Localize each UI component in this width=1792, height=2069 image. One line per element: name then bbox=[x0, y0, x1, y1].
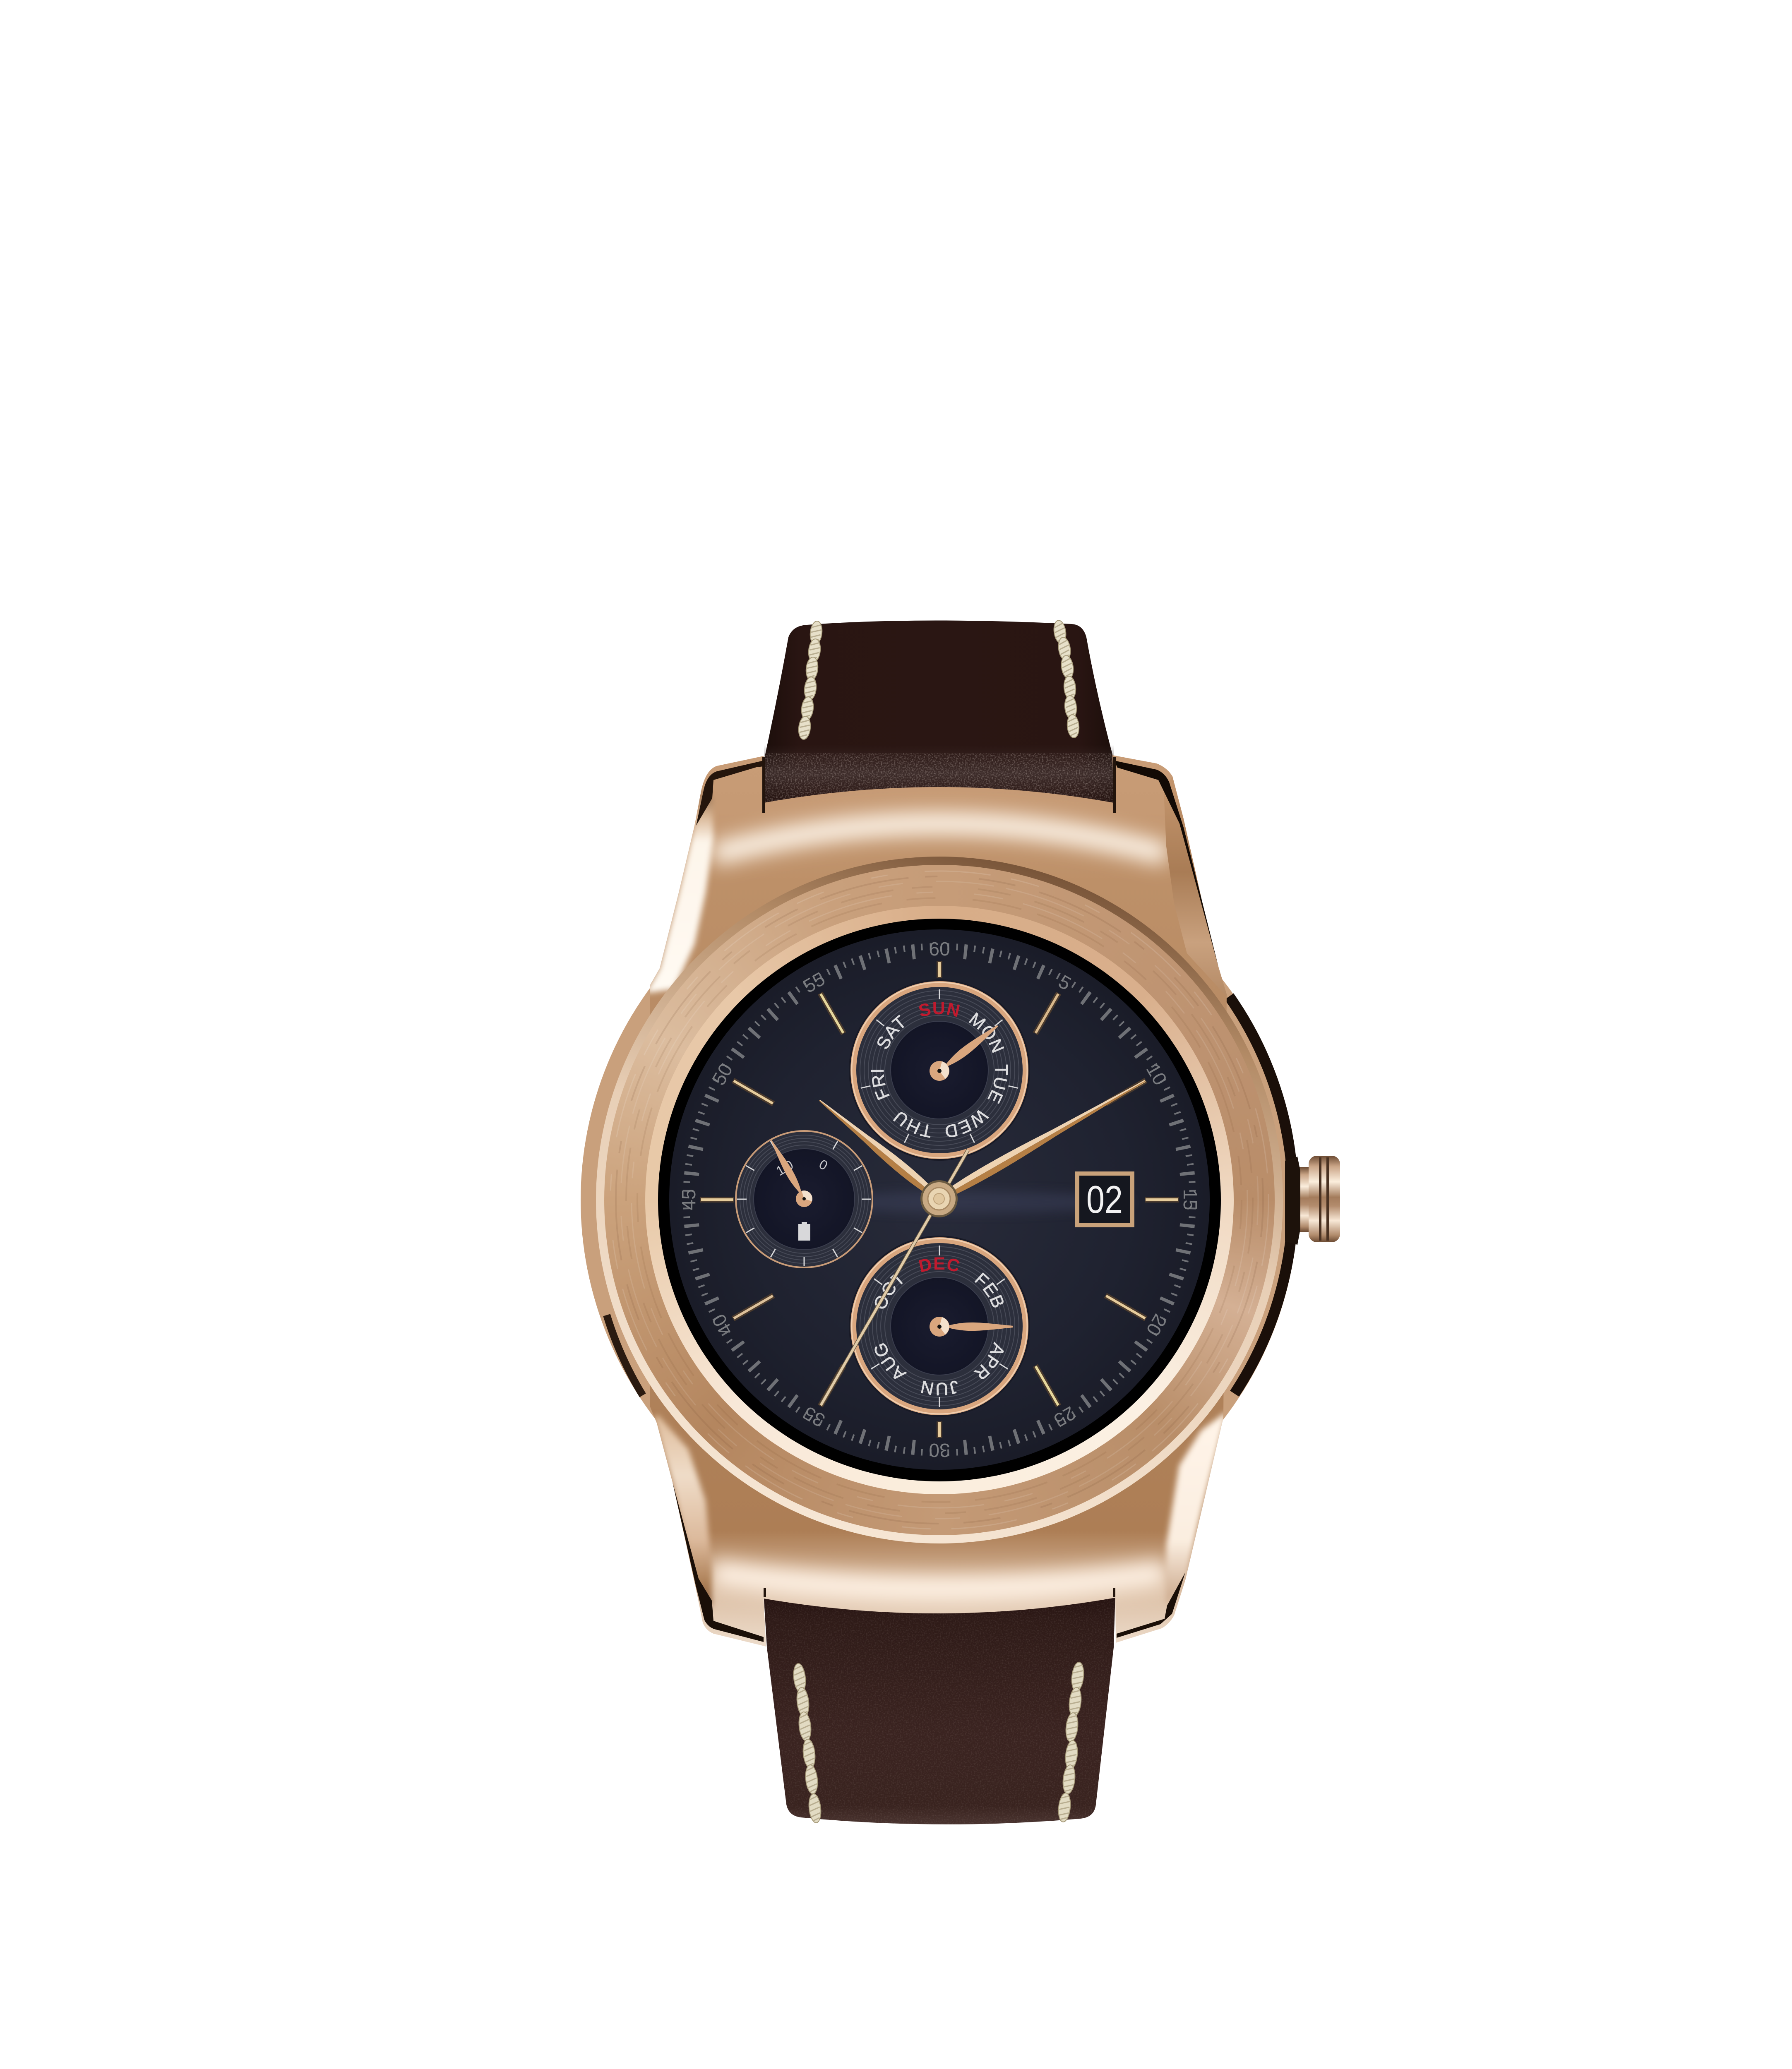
minute scale numbers: 25 bbox=[1050, 1402, 1079, 1431]
minute scale numbers: 15 bbox=[1179, 1189, 1201, 1210]
subdial: battery bbox=[736, 1131, 872, 1267]
dark edge upper-right bbox=[1114, 761, 1218, 967]
minute scale numbers: 50 bbox=[708, 1060, 737, 1089]
minute scale numbers: 55 bbox=[800, 968, 829, 997]
subdial: day of week: WED bbox=[938, 1103, 993, 1145]
crown bbox=[1292, 1156, 1340, 1242]
dial face bbox=[669, 929, 1210, 1470]
minute scale ticks bbox=[686, 946, 1193, 1453]
dial bbox=[669, 929, 1210, 1470]
minute scale numbers: 60 bbox=[929, 938, 950, 960]
dark edge lower-left bbox=[673, 1482, 764, 1642]
black inner ring bbox=[658, 919, 1221, 1481]
strap notches bbox=[764, 757, 1115, 1597]
watch case and lugs bbox=[646, 755, 1231, 1647]
case back edge bbox=[581, 841, 1300, 1559]
watch bbox=[581, 619, 1340, 1829]
minute scale numbers: 5 bbox=[1055, 970, 1075, 994]
subdial: day of week: MON bbox=[962, 1006, 1011, 1060]
inner polished bezel bbox=[645, 906, 1234, 1494]
subdial: month: DEC bbox=[917, 1254, 962, 1277]
subdial: battery: 10 bbox=[773, 1156, 798, 1179]
subdial: month: JUN bbox=[919, 1376, 961, 1399]
minute scale numbers: 10 bbox=[1142, 1060, 1171, 1089]
lower leather strap bbox=[764, 1593, 1115, 1829]
subdial: month: OCT bbox=[867, 1266, 912, 1316]
subdial: month: AUG bbox=[867, 1336, 912, 1387]
date window bbox=[1077, 1174, 1132, 1225]
subdial: day of week: SUN bbox=[917, 998, 962, 1021]
brushed bezel bbox=[604, 865, 1275, 1535]
icon: battery bbox=[798, 1222, 810, 1241]
upper-right flank bbox=[1164, 776, 1231, 1001]
upper leather strap bbox=[764, 619, 1114, 811]
subdial: month bbox=[849, 1236, 1030, 1417]
subdial: day of week: FRI bbox=[865, 1063, 895, 1103]
hour markers bbox=[700, 961, 1179, 1438]
lower-left flank bbox=[654, 1415, 712, 1608]
minute scale numbers: 20 bbox=[1142, 1311, 1171, 1339]
minute scale numbers: 40 bbox=[708, 1311, 737, 1339]
minute scale numbers: 35 bbox=[800, 1402, 829, 1431]
subdial: day of week: THU bbox=[888, 1104, 938, 1144]
subdial: day of week: SAT bbox=[871, 1010, 913, 1056]
upper-left flank highlight bbox=[646, 791, 713, 993]
minute hand bbox=[947, 1076, 1148, 1198]
centre hub bbox=[920, 1180, 958, 1217]
subdial: month: APR bbox=[968, 1337, 1011, 1386]
dial light streak bbox=[803, 1191, 1134, 1213]
dark edge lower-right bbox=[1117, 1572, 1185, 1638]
subdial: battery: 0 bbox=[817, 1157, 830, 1173]
minute scale numbers bbox=[678, 938, 1201, 1461]
subdial: day of week: TUE bbox=[982, 1060, 1014, 1107]
subdial: day of week bbox=[849, 979, 1030, 1161]
hour hand bbox=[815, 1095, 933, 1195]
minute scale numbers: 45 bbox=[678, 1189, 699, 1210]
outer polished rim bbox=[596, 857, 1283, 1543]
subdial: month: FEB bbox=[968, 1267, 1011, 1315]
lower-right flank bbox=[1166, 1411, 1227, 1606]
dark edge upper-left bbox=[696, 761, 764, 826]
minute scale numbers: 30 bbox=[929, 1440, 950, 1461]
second hand bbox=[821, 1150, 968, 1405]
date window: 02 bbox=[1086, 1178, 1123, 1221]
